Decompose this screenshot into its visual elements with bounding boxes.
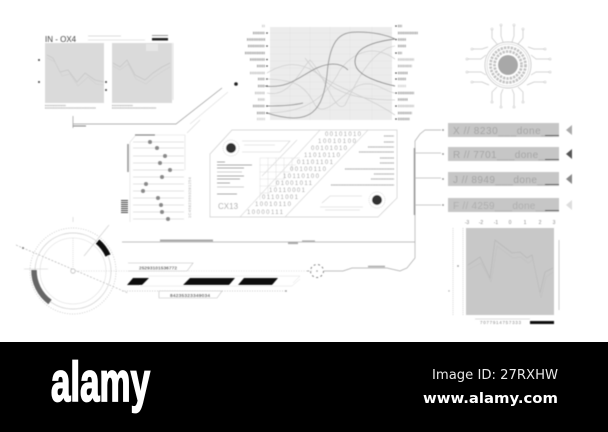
text block rows: [217, 162, 252, 194]
slider tracks: [133, 142, 184, 219]
label: CX13: CX13: [218, 202, 239, 211]
icon: circuit chip: [466, 24, 551, 108]
binary text band: 10010100: [318, 139, 357, 145]
binary text band: 10010110: [255, 202, 292, 208]
readout: number tag one: 25293101536772: [139, 266, 177, 272]
website: www.alamy.com: [423, 391, 558, 407]
light flow curves: [267, 46, 395, 115]
frame: right bracket and bottom rail: [122, 130, 441, 271]
readout: number tag two: [159, 291, 222, 299]
gray dial arc: [34, 270, 50, 302]
icon: endpoint dot: [234, 82, 238, 86]
axis labels: -1: [494, 220, 498, 226]
right row dots: [395, 25, 397, 120]
binary text band: 01101001: [262, 195, 299, 201]
logo: alamy: alamy: [51, 350, 150, 413]
connector frame lines: [73, 82, 238, 133]
axis labels: [465, 220, 556, 226]
binary text band: 00100110: [290, 167, 327, 173]
panel: slider list: [121, 135, 192, 222]
chart captions: [45, 106, 156, 108]
status row X: X // 8230___done__: [453, 126, 553, 137]
binary text band: 10000111: [247, 210, 284, 216]
chart: left line chart: [45, 43, 104, 103]
binary text band: 01001011: [276, 181, 313, 187]
panel: status rows: [442, 123, 572, 212]
left rulers: [453, 228, 463, 315]
binary text band: [247, 132, 362, 216]
chip traces: [467, 25, 550, 107]
readout: number tag one: [128, 263, 193, 272]
grid detail: [260, 158, 300, 200]
axis labels: 2: [539, 220, 542, 226]
image id: Image ID: 27RXHW: [432, 367, 558, 383]
status row J: J // 8949___done__: [453, 175, 549, 186]
binary text band: 10110100: [283, 174, 320, 180]
icon: dashed target: [307, 264, 324, 278]
right-aligned data rows: [331, 136, 394, 185]
right row labels: [398, 26, 418, 119]
diagonal dividers: [240, 130, 368, 217]
heading: IN - OX4: IN - OX4: [45, 35, 77, 44]
left row dots: [266, 32, 268, 114]
readout: number tag two: 84235323349034: [170, 293, 210, 299]
marker dots: [38, 59, 107, 91]
radar crosshair lines: [16, 217, 312, 293]
binary text band: 10110001: [269, 188, 306, 194]
icon: bottom-right target dot: [369, 192, 385, 208]
vertical code: 1C45823693281254: [187, 176, 192, 218]
footer band: [0, 342, 608, 432]
status row F: F // 4259___done__: [453, 201, 547, 212]
binary text band: 11010110: [304, 153, 341, 159]
dark flow curves: [265, 32, 395, 118]
axis labels: 0: [509, 220, 512, 226]
radar dial: [16, 217, 312, 314]
icon: top-left target dot: [223, 140, 239, 156]
circuit line detail: [242, 141, 363, 210]
slider knobs: [141, 140, 172, 221]
axis labels: -2: [479, 220, 483, 226]
icon: barcode: [121, 200, 128, 213]
left row labels: [245, 26, 265, 119]
chart caption: 7077914757333: [480, 320, 521, 325]
axis labels: 1: [524, 220, 527, 226]
black dial arc: [98, 242, 108, 256]
binary text band: 01101101: [297, 160, 334, 166]
panel: CX13 central console: [210, 130, 397, 217]
chart: sankey flow panel: [245, 25, 418, 120]
axis labels: -3: [465, 220, 469, 226]
panel: IN-OX4 twin charts: [38, 35, 173, 108]
binary text band: 00101010: [325, 132, 362, 138]
axis labels: 3: [553, 220, 556, 226]
binary text band: 00101010: [311, 146, 348, 152]
chart: right line chart: [112, 43, 172, 103]
black title tab: [152, 38, 168, 40]
status row R: R // 7701___done__: [453, 150, 550, 161]
black legend bar: [530, 321, 554, 324]
black parallelogram bars: [122, 276, 300, 292]
chart: large line chart: [448, 220, 559, 325]
